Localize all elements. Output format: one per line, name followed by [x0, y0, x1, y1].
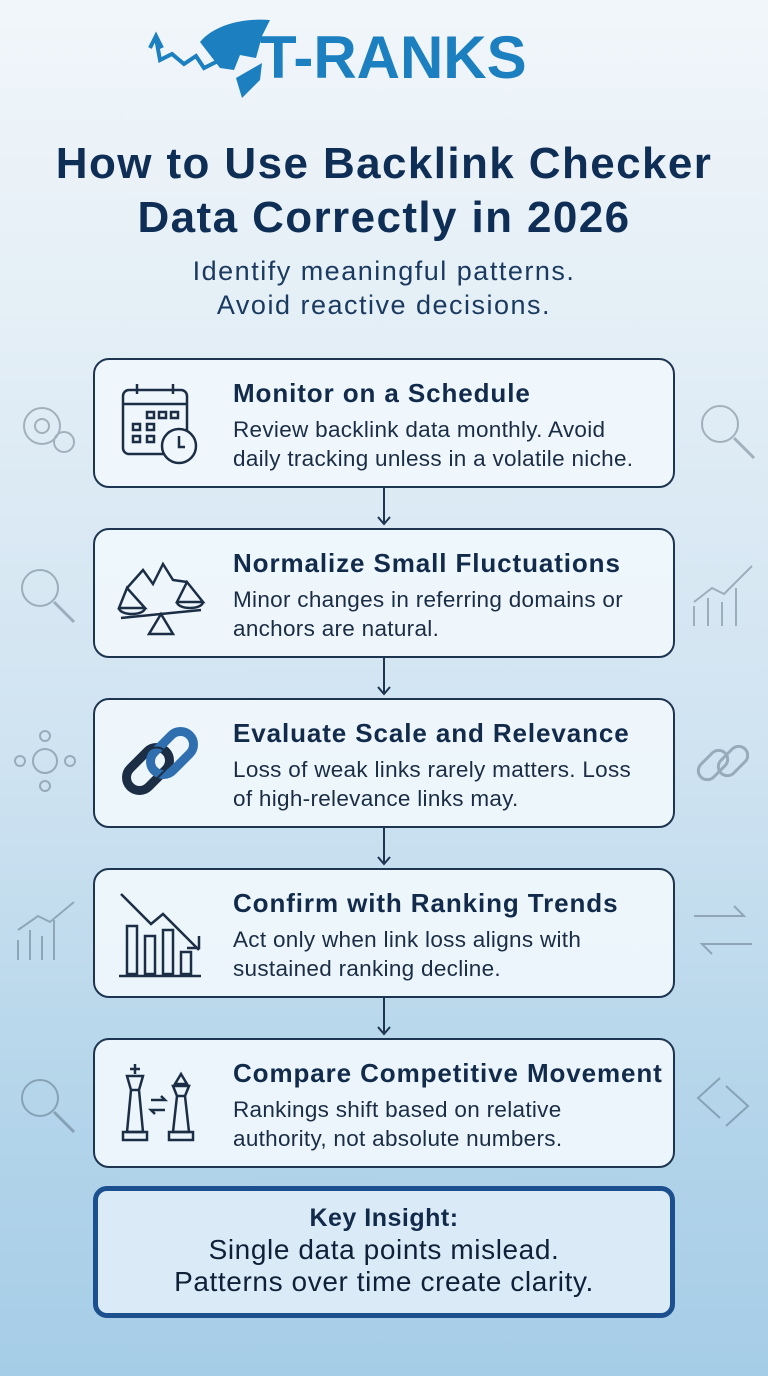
panel: monitor on a schedule — [93, 358, 675, 488]
callout: key insight: Single data points mislead. — [209, 1234, 559, 1265]
callout: key insight: Patterns over time create clarity. — [174, 1266, 594, 1297]
panel: compare competitive movement — [93, 1038, 675, 1168]
panel: compare competitive movement: Rankings shift based on relative — [233, 1097, 562, 1122]
side icons left — [23, 407, 75, 453]
panel: normalize small fluctuations: Normalize Small Fluctuations — [233, 548, 621, 578]
title: How to Use Backlink Checker — [56, 139, 712, 188]
panel: evaluate scale and relevance: Loss of weak links rarely matters. Loss — [233, 757, 631, 782]
panel: monitor on a schedule: Monitor on a Schedule — [233, 378, 531, 408]
title — [56, 139, 712, 242]
panel: normalize small fluctuations: anchors are natural. — [233, 616, 439, 641]
subtitle: Identify meaningful patterns. — [193, 256, 575, 286]
logo: T-RANKS — [260, 24, 527, 91]
side icons right — [701, 405, 755, 459]
panel: evaluate scale and relevance — [93, 698, 675, 828]
panel: normalize small fluctuations: Minor changes in referring domains or — [233, 587, 623, 612]
icon: calendar clock — [122, 384, 198, 464]
panel: confirm with ranking trends: Act only when link loss aligns with — [233, 927, 581, 952]
icon: t-rex arrow — [148, 20, 270, 98]
arrow — [377, 488, 391, 526]
callout: key insight: Key Insight: — [309, 1204, 459, 1232]
panel: evaluate scale and relevance: of high-relevance links may. — [233, 786, 519, 811]
subtitle: Avoid reactive decisions. — [217, 290, 551, 320]
arrow — [377, 658, 391, 696]
callout: key insight — [93, 1186, 675, 1318]
panel: compare competitive movement: authority, not absolute numbers. — [233, 1126, 562, 1151]
panel: monitor on a schedule: daily tracking unless in a volatile niche. — [233, 446, 633, 471]
icon: declining bar chart — [119, 893, 201, 978]
subtitle — [193, 256, 575, 320]
icon: chess pieces — [122, 1064, 194, 1142]
panel: normalize small fluctuations — [93, 528, 675, 658]
title: Data Correctly in 2026 — [137, 193, 630, 242]
panel: confirm with ranking trends: sustained ranking decline. — [233, 956, 501, 981]
panel: compare competitive movement: Compare Competitive Movement — [233, 1058, 663, 1088]
logo — [148, 20, 527, 98]
arrow — [377, 998, 391, 1036]
panel: monitor on a schedule: Review backlink data monthly. Avoid — [233, 417, 605, 442]
icon: chain link — [122, 727, 198, 795]
panel: confirm with ranking trends — [93, 868, 675, 998]
panel: confirm with ranking trends: Confirm with Ranking Trends — [233, 888, 618, 918]
arrow — [377, 828, 391, 866]
icon: scale — [117, 562, 206, 636]
panel: evaluate scale and relevance: Evaluate Scale and Relevance — [233, 718, 630, 748]
